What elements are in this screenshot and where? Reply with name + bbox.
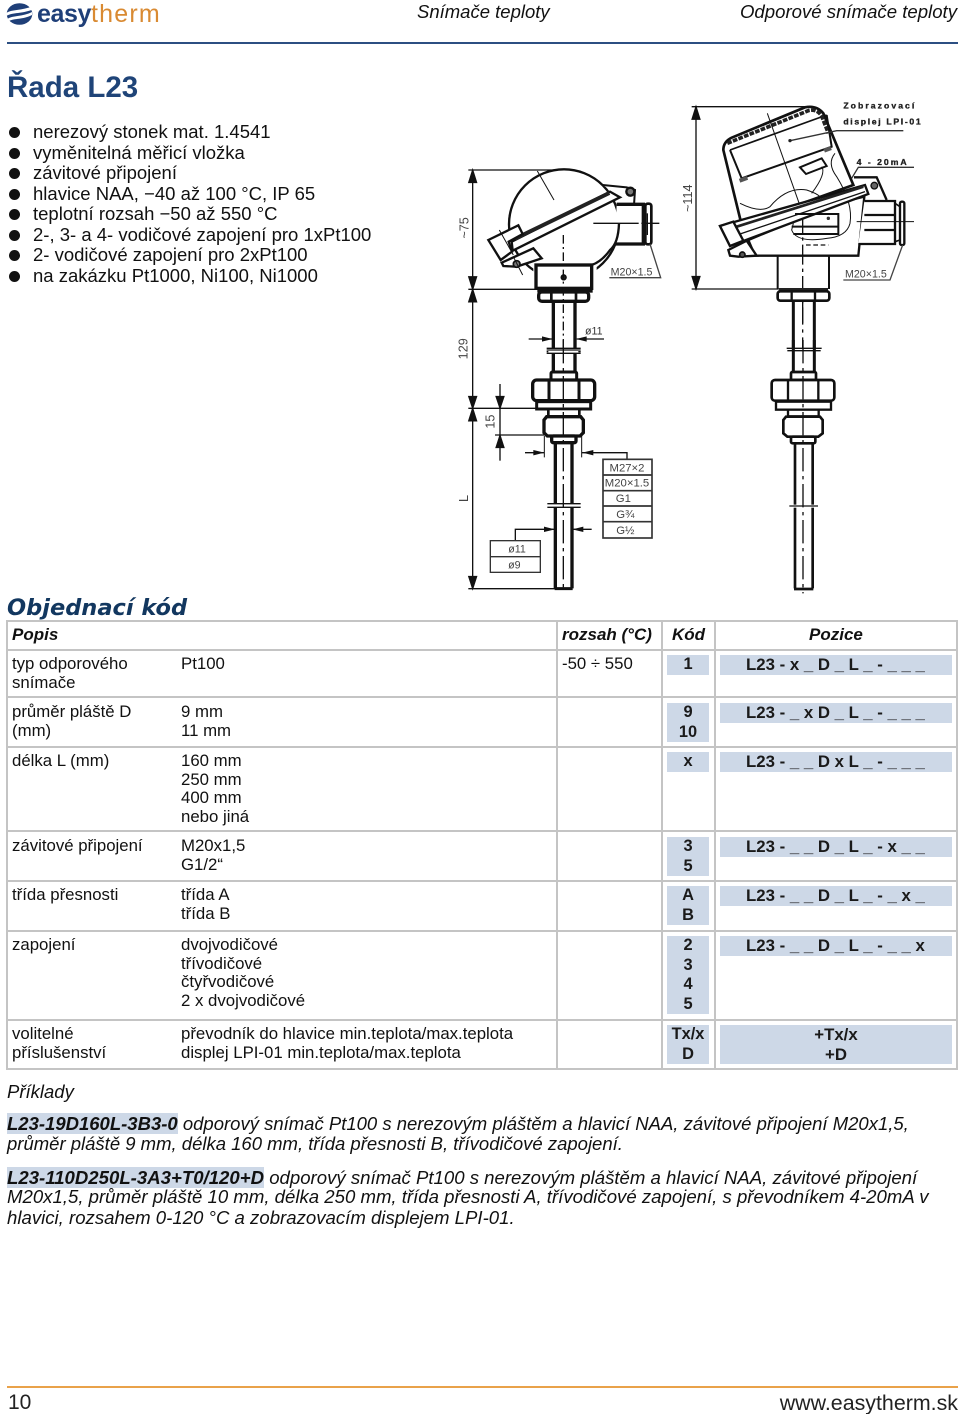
row: optional accessories: převodník do hlavice min.teplota/max.teplota displej LPI-01 min.teplota/max.teplota (181, 1024, 513, 1062)
header logo: therm (91, 0, 161, 28)
drawing: head with dimensions: ~75 (458, 217, 472, 239)
drawing: head with LPI-01 display: ~114 (681, 184, 695, 212)
header logo (6, 0, 161, 28)
row: optional accessories: volitelné příslušenství (12, 1024, 106, 1062)
row: wiring: 5 (683, 994, 693, 1012)
header logo: easy (37, 0, 91, 28)
row: thread connection: L23 - _ _ D _ L _ - x _ _ (746, 837, 925, 856)
table header row (12, 625, 863, 644)
row: accuracy class (12, 885, 952, 925)
examples heading: Příklady (7, 1081, 74, 1102)
drawing: head with LPI-01 display: M20×1.5 (845, 269, 887, 281)
row: wiring: 2 (683, 936, 693, 954)
example 1 (6, 1113, 909, 1154)
row: length: L23 - _ _ D x L _ - _ _ _ (746, 752, 925, 771)
technical drawing: standard sensor and sensor with display (456, 100, 921, 594)
row: thread connection: 3 (683, 837, 693, 855)
drawing: lower stem with mounting thread (457, 340, 652, 589)
drawing: head with dimensions: 129 (456, 338, 470, 359)
drawing: head with LPI-01 display (681, 100, 921, 348)
row: wiring: 3 (683, 956, 693, 974)
drawing: lower stem with mounting thread: L (457, 495, 471, 502)
row: thread connection (12, 836, 952, 876)
row: optional accessories: D (682, 1044, 694, 1062)
drawing: head with dimensions: M20×1.5 (611, 266, 653, 278)
drawing: lower stem with mounting thread: G½ (616, 525, 635, 537)
row: optional accessories: +Tx/x +D (814, 1025, 858, 1064)
table header row: Pozice (809, 625, 863, 644)
row: sheath diameter (12, 702, 952, 742)
drawing: lower stem with mounting thread: G¾ (616, 509, 635, 521)
row: accuracy class: B (682, 906, 694, 924)
row: wiring (12, 935, 952, 1014)
title: Řada L23 (7, 71, 138, 104)
drawing: lower stem with mounting thread: ø9 (508, 560, 521, 572)
row: thread connection: závitové připojení (12, 836, 143, 855)
drawing: head with LPI-01 display: 4 - 20mA (857, 157, 907, 167)
feature bullet list: teplotní rozsah −50 až 550 °C (33, 203, 277, 224)
row: sheath diameter: průměr pláště D (mm) (12, 702, 131, 740)
drawing: lower stem of display variant (772, 340, 834, 593)
example 2: M20x1,5, průměr pláště 10 mm, délka 250 mm, třída přesnosti A, třívodičové zapojení, s převodníkem 4-20mA v (7, 1186, 928, 1207)
example 2: hlavici, rozsahem 0-120 °C a zobrazovacím displejem LPI-01. (7, 1207, 515, 1228)
row: length: 160 mm 250 mm 400 mm nebo jiná (181, 751, 249, 826)
row: sheath diameter: 9 (683, 703, 693, 721)
drawing: lower stem with mounting thread: M27×2 (610, 462, 644, 474)
table header row: Popis (12, 625, 58, 644)
row: thread connection: M20x1,5 G1/2“ (181, 836, 245, 874)
row: wiring: L23 - _ _ D _ L _ - _ _ x (746, 936, 925, 955)
example 2: L23-110D250L-3A3+T0/120+D odporový snímač Pt100 s nerezovým pláštěm a hlavicí NAA, závitové připojení (7, 1167, 917, 1188)
feature bullet list: 2- vodičové zapojení pro 2xPt100 (33, 244, 308, 265)
table header row: Kód (672, 625, 705, 644)
header subsection title: Odporové snímače teploty (740, 1, 957, 22)
section heading: order code: Objednací kód (7, 595, 187, 621)
row: sheath diameter: 10 (679, 722, 697, 740)
row: accuracy class: A (682, 886, 694, 904)
row: wiring: zapojení (12, 935, 75, 954)
example 1: L23-19D160L-3B3-0 odporový snímač Pt100 s nerezovým pláštěm a hlavicí NAA, závitové připojení M20x1,5, (7, 1113, 909, 1134)
row: accuracy class: třída přesnosti (12, 885, 118, 904)
drawing: head with dimensions (456, 169, 661, 588)
row: optional accessories: Tx/x (672, 1025, 704, 1043)
row: sheath diameter: L23 - _ x D _ L _ - _ _ _ (746, 703, 925, 722)
row: wiring: dvojvodičové třívodičové čtyřvodičové 2 x dvojvodičové (181, 935, 305, 1010)
row: accuracy class: třída A třída B (181, 885, 230, 923)
drawing: head with LPI-01 display: displej LPI-01 (843, 116, 921, 126)
row: sensor type: -50 ÷ 550 (562, 654, 633, 673)
drawing: lower stem with mounting thread: M20×1.5 (605, 478, 649, 490)
row: wiring: 4 (683, 975, 693, 993)
row: length: délka L (mm) (12, 751, 109, 770)
row: sensor type: Pt100 (181, 654, 225, 673)
feature bullet list: vyměnitelná měřicí vložka (33, 142, 245, 163)
table header row: rozsah (°C) (562, 625, 652, 644)
drawing: lower stem with mounting thread: ø11 (508, 543, 526, 555)
feature bullet list: hlavice NAA, −40 až 100 °C, IP 65 (33, 183, 315, 204)
feature bullet list: nerezový stonek mat. 1.4541 (33, 121, 271, 142)
example 2 (7, 1167, 930, 1228)
row: sensor type: typ odporového snímače (12, 654, 128, 692)
order code table (6, 620, 958, 1070)
drawing: head with LPI-01 display: Zobrazovací (843, 100, 915, 110)
row: accuracy class: L23 - _ _ D _ L _ - _ x _ (746, 886, 925, 905)
drawing: head with dimensions: ø11 (585, 326, 603, 338)
drawing: lower stem with mounting thread: 15 (484, 415, 498, 429)
page number: 10 (8, 1391, 31, 1414)
row: length: x (683, 752, 693, 770)
row: sensor type: L23 - x _ D _ L _ - _ _ _ (746, 655, 925, 674)
feature bullet list (9, 121, 371, 286)
row: thread connection: 5 (683, 856, 693, 874)
row: optional accessories (12, 1024, 952, 1064)
row: sensor type (12, 654, 952, 692)
row: sheath diameter: 9 mm 11 mm (181, 702, 231, 740)
row: length (12, 751, 952, 826)
example 1: průměr pláště 9 mm, délka 160 mm, třída přesnosti B, třívodičové zapojení. (7, 1133, 623, 1154)
header section title: Snímače teploty (417, 1, 550, 22)
drawing: lower stem with mounting thread: G1 (616, 493, 631, 505)
row: sensor type: 1 (683, 655, 693, 673)
feature bullet list: závitové připojení (33, 162, 177, 183)
feature bullet list: na zakázku Pt1000, Ni100, Ni1000 (33, 265, 318, 286)
feature bullet list: 2-, 3- a 4- vodičové zapojení pro 1xPt100 (33, 224, 371, 245)
